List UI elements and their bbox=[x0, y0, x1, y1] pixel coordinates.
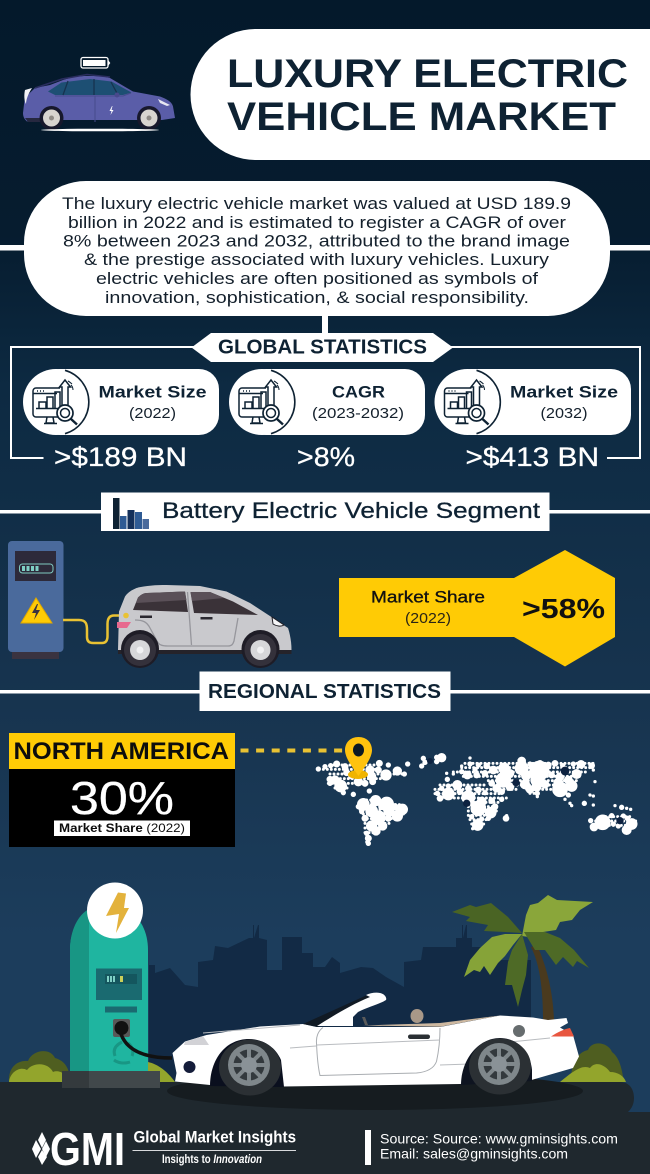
icon: charging station bbox=[8, 541, 64, 659]
charging cable bbox=[63, 616, 124, 643]
panel: North America bbox=[9, 733, 235, 847]
logo: Global Market Insights: Insights to Innovation bbox=[162, 1152, 262, 1166]
card: CAGR: (2023-2032) bbox=[312, 405, 404, 422]
callout: market share 58%: >58% bbox=[522, 593, 605, 624]
callout: market share 58% bbox=[339, 550, 615, 666]
heading: global statistics bbox=[192, 333, 453, 362]
callout: market share 58%: Market Share bbox=[371, 588, 485, 606]
icon: teal charging station bbox=[62, 882, 172, 1088]
title: LUXURY ELECTRIC bbox=[227, 52, 628, 96]
panel: North America: NORTH AMERICA bbox=[14, 738, 229, 765]
card: market size 2022 bbox=[23, 369, 219, 435]
icon: blue electric car with battery bbox=[23, 58, 175, 131]
ground and footer band bbox=[0, 1072, 650, 1174]
card: market size 2022: Market Size bbox=[98, 382, 206, 402]
intro text panel: electric vehicles are often positioned as symbols of bbox=[96, 270, 538, 288]
card: market size 2032: (2032) bbox=[540, 405, 588, 422]
panel: North America: 30% bbox=[70, 772, 174, 824]
intro text panel: The luxury electric vehicle market was valued at USD 189.9 bbox=[62, 195, 571, 213]
world map of bubbles bbox=[318, 757, 637, 843]
statistic values: >$189 BN bbox=[54, 442, 187, 472]
callout: market share 58%: (2022) bbox=[405, 610, 451, 627]
title pill: VEHICLE MARKET bbox=[227, 95, 616, 139]
intro text panel: & the prestige associated with luxury vehicles. Luxury bbox=[84, 251, 550, 269]
statistic values: >$413 BN bbox=[466, 442, 599, 472]
panel: North America: Market Share (2022) bbox=[59, 821, 185, 835]
statistic values bbox=[54, 442, 599, 472]
heading: battery electric vehicle segment bbox=[101, 492, 550, 531]
icon: white convertible car bbox=[172, 993, 579, 1096]
card: market size 2022: (2022) bbox=[129, 405, 176, 422]
card: market size 2032 bbox=[434, 369, 631, 435]
intro text panel: innovation, sophistication, & social responsibility. bbox=[105, 289, 529, 307]
statistic values: >8% bbox=[297, 442, 355, 472]
intro text panel: billion in 2022 and is estimated to register a CAGR of over bbox=[68, 214, 567, 232]
footer divider bar bbox=[365, 1130, 371, 1165]
contact text: Source: Source: www.gminsights.com bbox=[380, 1130, 618, 1146]
car shadow bbox=[167, 1072, 583, 1110]
card: CAGR: CAGR bbox=[332, 382, 385, 402]
contact text bbox=[380, 1130, 618, 1162]
logo: Global Market Insights: Global Market Insights bbox=[134, 1128, 296, 1146]
city skyline bbox=[149, 925, 531, 1085]
divider line bbox=[0, 510, 650, 514]
icon: grey electric car bbox=[117, 585, 292, 668]
logo: Global Market Insights bbox=[32, 1123, 296, 1174]
title pill bbox=[190, 29, 650, 160]
logo: Global Market Insights: GMI bbox=[50, 1123, 125, 1174]
icon: bar chart bbox=[113, 498, 149, 529]
divider line bbox=[0, 690, 650, 694]
icon: palm tree bbox=[452, 895, 593, 1020]
dashed connector bbox=[240, 748, 344, 752]
intro text panel bbox=[24, 181, 610, 316]
global statistics frame bbox=[11, 347, 640, 458]
map: Americas and Greenland bbox=[318, 757, 442, 843]
icon: location pin bbox=[345, 737, 372, 779]
divider lines beside intro bbox=[0, 245, 650, 336]
card: market size 2032: Market Size bbox=[510, 382, 618, 402]
map: Eurasia, Africa and Australia bbox=[435, 758, 637, 830]
intro text panel: 8% between 2023 and 2032, attributed to the brand image bbox=[63, 232, 570, 250]
card: CAGR bbox=[229, 369, 425, 435]
heading: regional statistics bbox=[200, 672, 450, 711]
contact text: Email: sales@gminsights.com bbox=[380, 1146, 568, 1162]
heading: regional statistics: REGIONAL STATISTICS bbox=[208, 681, 441, 703]
bushes bbox=[9, 1043, 626, 1082]
heading: global statistics: GLOBAL STATISTICS bbox=[218, 336, 427, 358]
heading: battery electric vehicle segment: Battery Electric Vehicle Segment bbox=[162, 498, 540, 523]
icon: logo diamonds bbox=[32, 1132, 50, 1165]
